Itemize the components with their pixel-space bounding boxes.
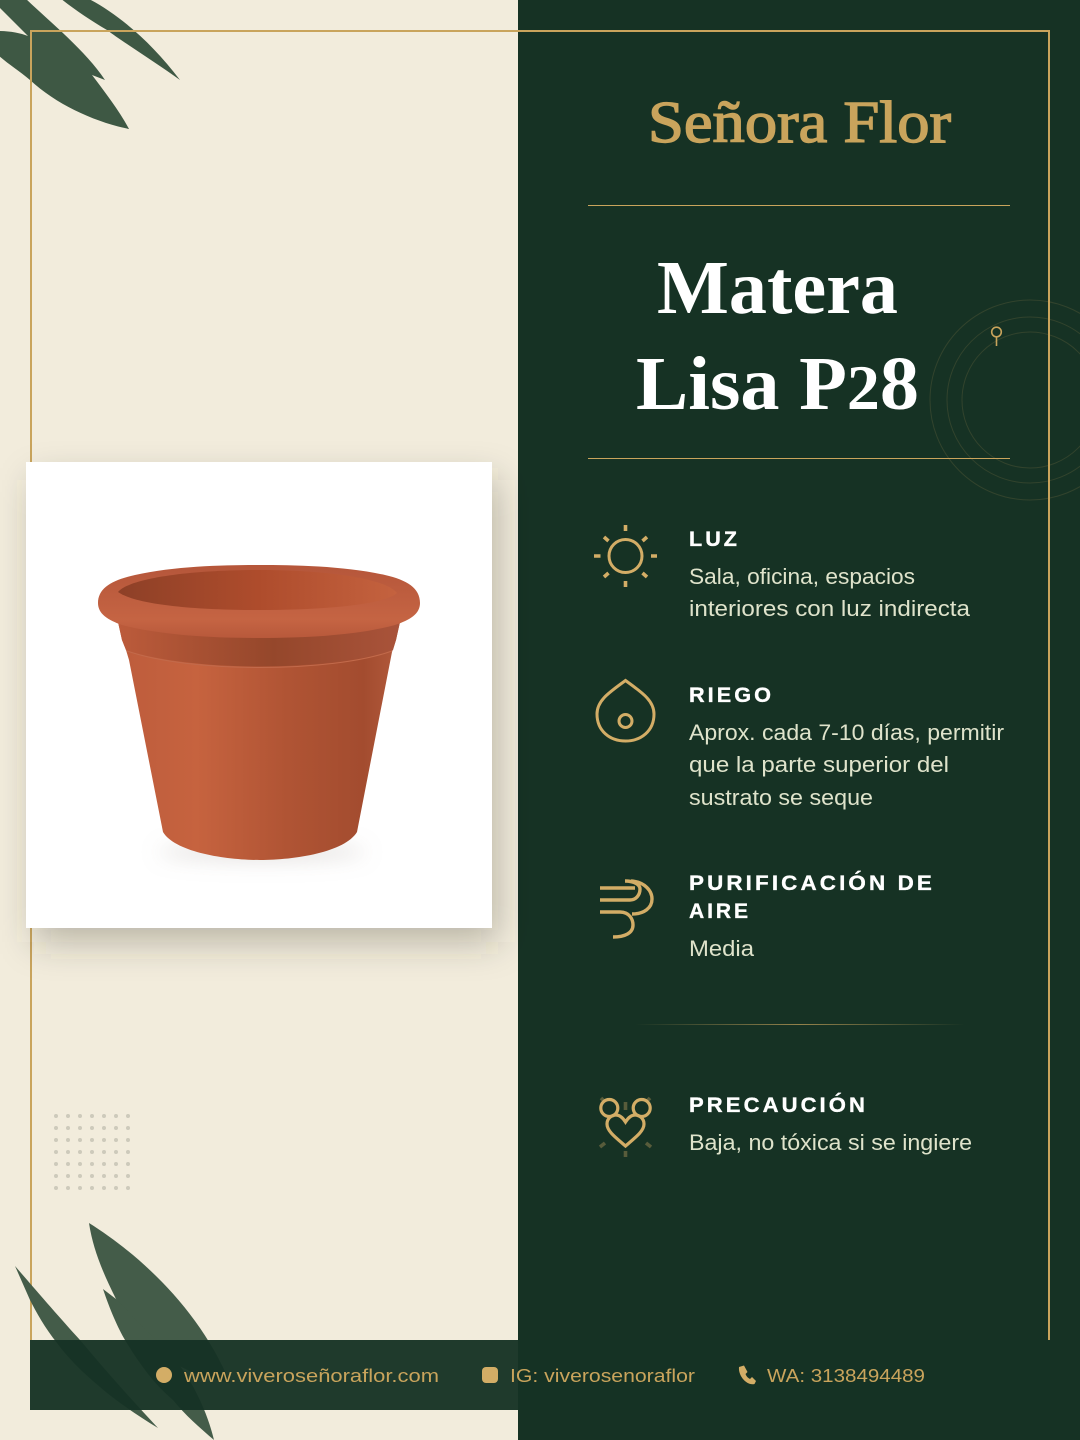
terracotta pot [98,565,420,860]
footer contact bar [30,1340,1050,1410]
section: luz: interiores con luz indirecta [689,596,971,621]
icon: wind [600,881,652,937]
section: luz: LUZ [689,527,740,551]
decorative rings [930,300,1080,500]
section: luz [689,527,971,621]
whatsapp text: WA: 3138494489 [767,1365,925,1386]
section: precaucion: PRECAUCIÓN [689,1092,868,1117]
panel: cream background [0,0,518,1440]
section: purificacion de aire: AIRE [689,899,751,923]
divider faded [635,1024,965,1025]
icon: water drop [597,680,654,741]
product name line 1: Matera [657,246,898,330]
section: purificacion de aire: PURIFICACIÓN DE [689,870,935,895]
decorative leaves: bottom left [15,1223,230,1440]
divider bottom [588,458,1010,459]
icon: instagram square [482,1367,498,1383]
section: purificacion de aire [689,870,935,961]
section: precaucion: Baja, no tóxica si se ingiere [689,1130,972,1155]
product photo card [26,462,498,942]
brand title: Señora Flor [648,89,951,155]
section: riego [689,683,1005,810]
section: luz: Sala, oficina, espacios [689,564,915,589]
icon: small pin [992,327,1001,346]
icon: phone [739,1366,756,1384]
product name line 2: Lisa P28 [636,342,919,426]
section: riego: RIEGO [689,683,774,707]
section: riego: Aprox. cada 7-10 días, permitir [689,720,1005,745]
website text: www.viveroseñoraflor.com [183,1365,439,1386]
divider top [588,205,1010,206]
section: riego: que la parte superior del [689,752,949,777]
section: purificacion de aire: Media [689,936,754,961]
icon: website dot [156,1367,172,1383]
icon: sun [594,525,657,587]
dot pattern [54,1114,130,1190]
instagram text: IG: viverosenoraflor [510,1365,695,1386]
icon: heart with circles [600,1098,651,1157]
panel: dark green background [518,0,1080,1440]
section: riego: sustrato se seque [689,785,873,810]
decorative leaves: top left [0,0,180,129]
pot ground shadow [158,843,366,861]
section: precaucion [689,1092,972,1155]
